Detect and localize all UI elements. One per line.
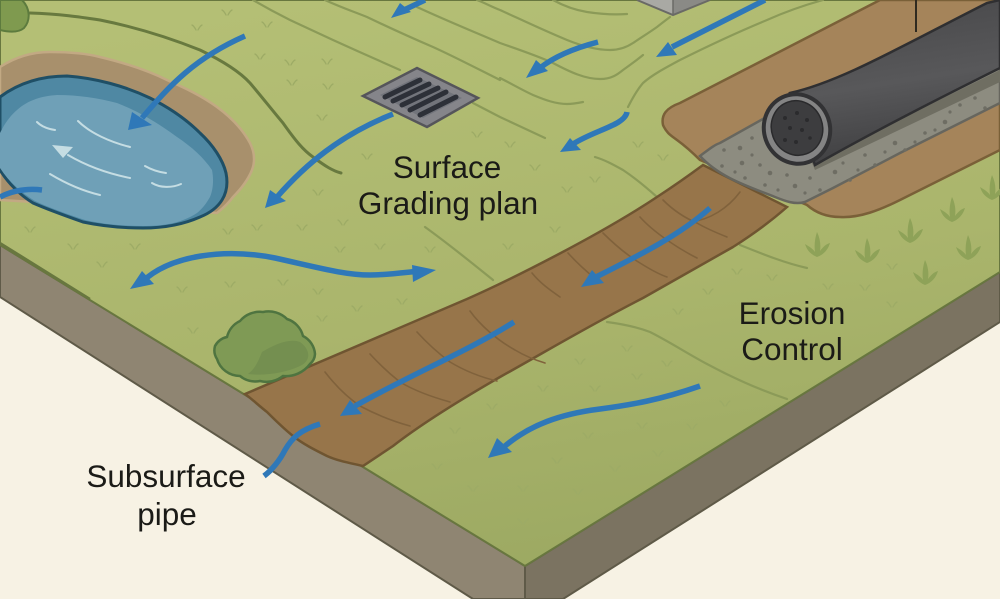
concrete box structure [637, 0, 710, 15]
water ripples [37, 121, 181, 195]
label: subsurface pipe: pipe [137, 496, 197, 532]
blue flow arrows [0, 0, 765, 476]
arrow: top centre [391, 0, 425, 18]
arrow: to lawn [560, 112, 627, 152]
ground slab: right side face [525, 272, 1000, 599]
label: erosion control: Control [741, 331, 843, 367]
label: erosion control: Erosion [739, 295, 845, 331]
ground slab: left side face [0, 245, 525, 599]
swale cross ribs [325, 192, 740, 426]
trench wall seam [915, 0, 917, 32]
pipe open end [751, 82, 843, 176]
arrow: channel lower [340, 322, 514, 416]
grass tufts [25, 10, 897, 524]
bush top left [0, 0, 29, 32]
bush [214, 311, 315, 382]
storm drain grate [363, 68, 478, 127]
pond bank [0, 52, 254, 213]
label: surface grading plan: Surface [393, 149, 501, 185]
arrow: erosion-control runoff [488, 386, 700, 458]
arrow: two-way sheet flow [130, 254, 436, 289]
arrow: into pond [128, 36, 245, 130]
lawn lower edge line [0, 243, 90, 299]
black drainage pipe [751, 0, 1000, 176]
detention pond [0, 52, 254, 228]
arrow: grading swale [526, 42, 598, 78]
gravel speckles [720, 96, 987, 195]
pond water [0, 76, 227, 228]
grading contour lines [253, 0, 823, 399]
arrow: outfall to subsurface pipe [264, 424, 320, 476]
arrow: channel upper [581, 208, 710, 287]
arrow: from grate [265, 114, 393, 208]
swale channel [245, 165, 787, 466]
gravel bed [700, 60, 1000, 203]
large grass clumps: erosion control planting [805, 175, 1000, 285]
label: surface grading plan: Grading plan [358, 185, 538, 221]
label: subsurface pipe: Subsurface [86, 458, 246, 494]
arrow: from box [656, 0, 765, 57]
pond flow arrowhead [52, 145, 73, 158]
brown drainage trench around pipe [663, 0, 1000, 217]
arrow: pond inlet [0, 189, 42, 197]
dark swale contour line [30, 13, 341, 173]
